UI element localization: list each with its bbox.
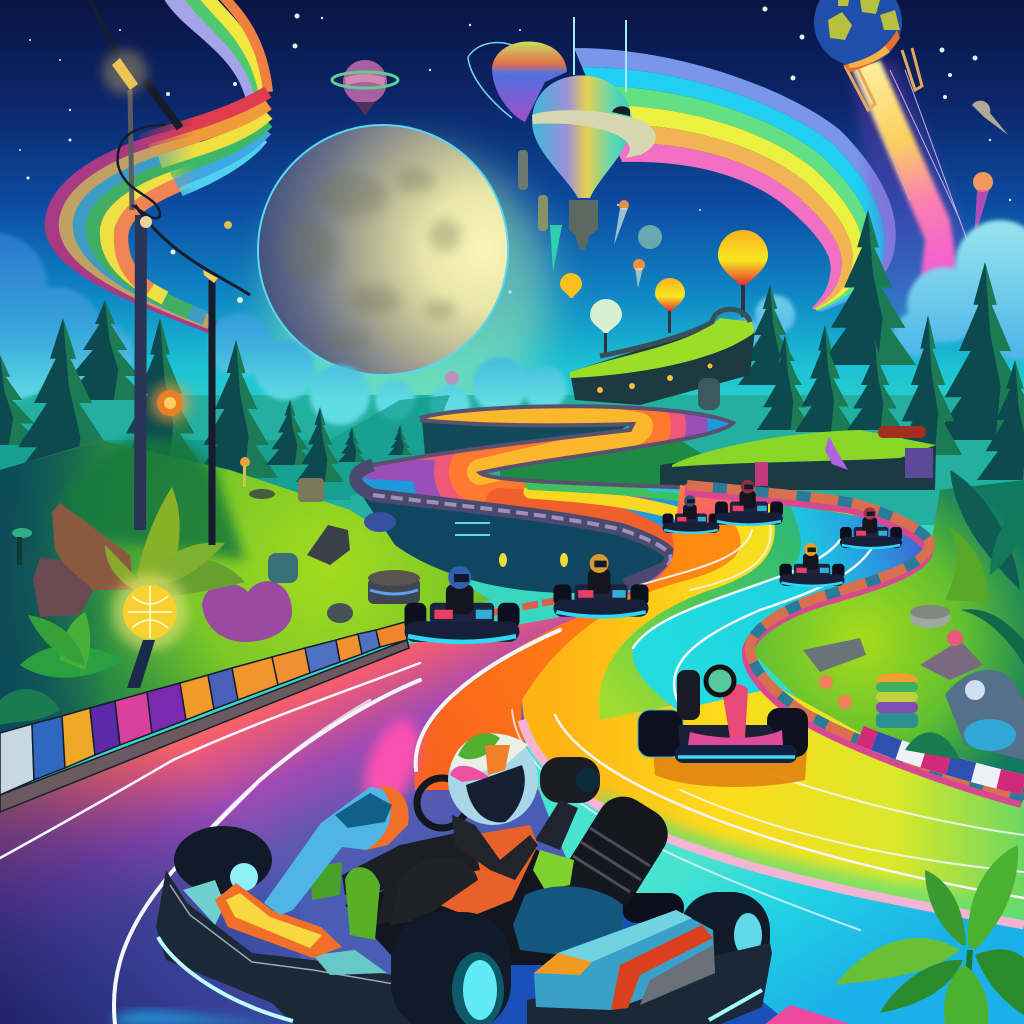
left hill	[0, 440, 490, 770]
moon	[258, 125, 550, 430]
rear left wheel	[174, 826, 272, 894]
main rainbow road	[0, 485, 1024, 1024]
orange glow orb	[150, 383, 190, 423]
dark hill mound	[60, 437, 245, 560]
meadow objects left	[12, 457, 420, 623]
cliff details	[455, 523, 568, 567]
rainbow balloon planets	[468, 41, 656, 250]
driver arm	[452, 815, 538, 880]
kart chassis base	[345, 840, 622, 965]
boulders left	[33, 503, 350, 642]
stars	[19, 6, 1011, 294]
foreground plant	[835, 845, 1024, 1024]
small ringed planet	[332, 60, 398, 116]
rear right wheel	[622, 892, 770, 976]
far mountains	[0, 395, 450, 500]
right plateau	[500, 426, 936, 490]
right side plants	[945, 470, 1024, 665]
cliff under far track	[355, 485, 675, 593]
front right wheel	[391, 912, 511, 1024]
distant ground band	[0, 395, 1024, 525]
right bumper with colored panel	[527, 910, 772, 1024]
steering wheel	[417, 778, 467, 828]
barrier between mid karts	[405, 600, 560, 632]
far winding track	[362, 408, 729, 549]
trees right	[738, 210, 1024, 480]
top track cliff	[422, 420, 630, 455]
helmet	[448, 733, 538, 825]
right lower meadow	[750, 480, 1024, 800]
driver legs and seat	[342, 825, 538, 925]
left foreground barrier	[0, 622, 409, 812]
upper plateau	[570, 309, 755, 410]
glowing lamp orb	[112, 574, 188, 688]
track lane lines	[0, 525, 1024, 1024]
hot-air balloons	[445, 101, 1008, 385]
clouds right	[729, 220, 1024, 360]
clouds left	[0, 233, 567, 425]
small teal panels	[183, 880, 387, 975]
comet balloon with beam	[814, 0, 990, 320]
big rainbow arc right	[574, 48, 896, 312]
green battery box	[533, 850, 574, 890]
trees left	[0, 300, 412, 488]
foreground kart	[156, 733, 772, 1024]
meadow objects right	[803, 605, 1024, 760]
blue engine box	[513, 886, 623, 957]
exhaust and engine pipes	[535, 757, 678, 919]
left bumper	[156, 870, 417, 1024]
distant small karts	[404, 480, 902, 642]
mid kart	[638, 667, 808, 787]
tropical plants left	[0, 487, 245, 725]
left hill shade	[0, 440, 110, 770]
rainbow ribbon left	[52, 0, 268, 328]
far track barriers	[356, 406, 753, 585]
orange side panel	[215, 883, 342, 958]
blue nose	[264, 786, 409, 915]
right curving barrier	[685, 485, 1024, 802]
green shoes	[310, 862, 380, 940]
street lamps and wires	[90, 0, 250, 545]
sparkle lines above balloons	[574, 17, 626, 92]
